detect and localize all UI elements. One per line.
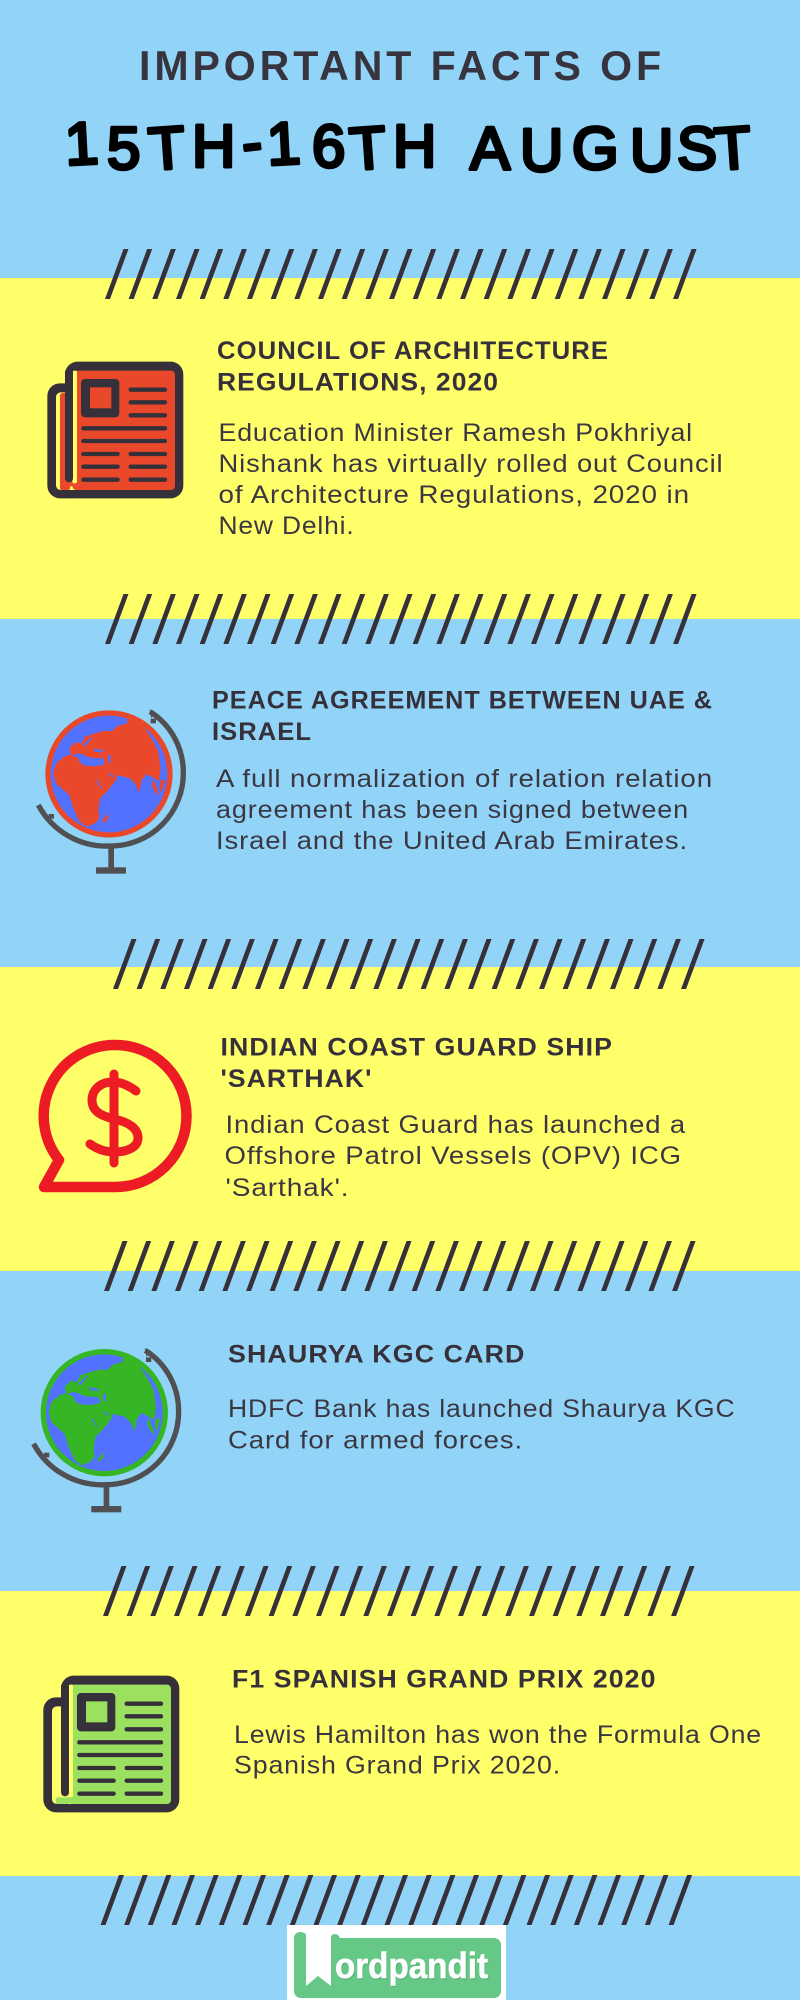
- body text: HDFC Bank has launched Shaurya KGC: [228, 1395, 736, 1423]
- body text: [228, 1395, 736, 1454]
- body text: [224, 1111, 686, 1202]
- icon: green globe: [34, 1348, 179, 1512]
- body text: Offshore Patrol Vessels (OPV) ICG: [224, 1142, 682, 1170]
- icon: dollar speech bubble: [44, 1045, 186, 1187]
- icon: green newspaper: [43, 1676, 179, 1812]
- body text: Spanish Grand Prix 2020.: [234, 1752, 561, 1780]
- panel: footer: [0, 1876, 800, 2000]
- title: important facts of: IMPORTANT FACTS OF: [139, 42, 665, 89]
- panel: Indian Coast Guard Ship: [0, 967, 800, 1271]
- heading: [217, 337, 609, 396]
- panel: F1 Spanish Grand Prix: [0, 1591, 800, 1876]
- heading: REGULATIONS, 2020: [217, 368, 499, 396]
- heading: 'SARTHAK': [220, 1065, 372, 1093]
- body text: A full normalization of relation relation: [216, 765, 713, 793]
- body text: of Architecture Regulations, 2020 in: [218, 481, 690, 509]
- heading: F1 SPANISH GRAND PRIX 2020: [232, 1666, 656, 1694]
- heading: [212, 686, 713, 746]
- logo: wordpandit: ordpandit: [335, 1945, 488, 1986]
- heading: PEACE AGREEMENT BETWEEN UAE &: [212, 686, 713, 714]
- body text: 'Sarthak'.: [226, 1174, 350, 1202]
- logo: wordpandit: [287, 1925, 506, 2000]
- body text: Nishank has virtually rolled out Council: [218, 450, 724, 478]
- body text: [216, 765, 713, 855]
- body text: Israel and the United Arab Emirates.: [216, 827, 688, 855]
- icon: red globe: [38, 709, 183, 874]
- heading: COUNCIL OF ARCHITECTURE: [217, 337, 609, 365]
- logo: wordpandit: ordpandit: [336, 1946, 489, 1988]
- icon: red newspaper: [47, 362, 183, 498]
- body text: Card for armed forces.: [228, 1426, 523, 1454]
- body text: Indian Coast Guard has launched a: [226, 1111, 686, 1139]
- body text: [218, 419, 724, 540]
- body text: New Delhi.: [218, 512, 354, 540]
- heading: INDIAN COAST GUARD SHIP: [220, 1034, 613, 1062]
- panel: Peace Agreement: [0, 619, 800, 967]
- heading: [220, 1034, 613, 1093]
- body text: agreement has been signed between: [216, 796, 689, 824]
- body text: Lewis Hamilton has won the Formula One: [234, 1721, 762, 1749]
- body text: [234, 1721, 762, 1780]
- panel: header: [0, 0, 800, 278]
- heading: ISRAEL: [212, 718, 312, 746]
- body text: Education Minister Ramesh Pokhriyal: [218, 419, 693, 447]
- panel: Council of Architecture Regulations: [0, 278, 800, 619]
- title: date: 15TH-16TH AUGUST: [63, 108, 753, 184]
- heading: SHAURYA KGC CARD: [228, 1340, 526, 1368]
- panel: Shaurya KGC Card: [0, 1271, 800, 1591]
